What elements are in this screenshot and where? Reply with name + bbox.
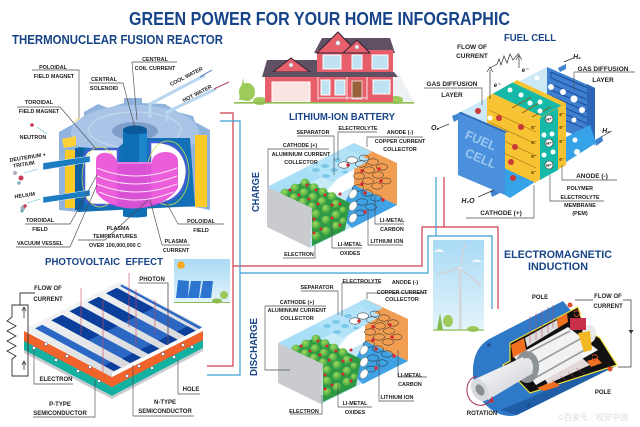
panel: wind turbine — [433, 240, 484, 332]
fusion reactor labels: PLASMA — [165, 239, 187, 245]
fuel cell labels — [424, 44, 635, 218]
panel: photovoltaic effect — [7, 256, 230, 417]
fusion reactor labels: POLOIDAL — [187, 219, 216, 225]
heading: electromagnetic induction: ELECTROMAGNETIC — [504, 249, 612, 261]
fusion reactor labels: SOLENOID — [90, 86, 118, 92]
fuel cell plate text: FUEL — [463, 128, 499, 154]
fuel cell labels: GAS DIFFUSION — [427, 81, 478, 88]
battery cell: discharge — [278, 299, 408, 404]
discharge labels: OXIDES — [345, 410, 366, 416]
fuel cell illustration: e⁻ — [531, 140, 537, 146]
house illustration — [234, 32, 414, 105]
fuel cell labels: O₂ — [431, 125, 439, 132]
particles — [13, 123, 47, 212]
solar cell layers — [24, 282, 203, 399]
discharge labels: CARBON — [398, 382, 422, 388]
external circuit and gas arrows — [437, 54, 612, 197]
fuel cell illustration: H⁺ — [546, 117, 552, 122]
label: discharge: DISCHARGE — [249, 318, 260, 376]
fusion reactor labels: NEUTRON — [20, 135, 46, 141]
fuel cell illustration: H⁺ — [546, 141, 552, 146]
fuel cell labels: H₂ — [573, 54, 581, 61]
resistor circuit — [7, 293, 35, 376]
central solenoid — [123, 126, 147, 218]
fuel cell plate text — [463, 128, 499, 172]
charge labels: LITHIUM ION — [371, 239, 404, 245]
fuel cell labels: GAS DIFFUSION — [578, 66, 629, 73]
fusion reactor labels: OVER 100,000,000 C — [89, 243, 141, 249]
panel: thermonuclear fusion reactor — [9, 33, 229, 254]
fuel cell labels: (PEM) — [572, 211, 588, 217]
generator labels — [467, 294, 623, 417]
fusion reactor labels: TRITIUM — [13, 160, 36, 170]
charge labels: LI-METAL — [338, 242, 363, 248]
charge labels: CARBON — [380, 227, 404, 233]
fuel cell illustration: e⁻ — [559, 112, 565, 118]
plasma torus — [96, 152, 178, 208]
fuel cell plate text: CELL — [463, 146, 499, 172]
generator labels: CURRENT — [593, 304, 623, 310]
fusion reactor labels: TEMPERATURES — [93, 234, 138, 240]
discharge labels: CATHODE (+) — [280, 300, 314, 306]
discharge labels: ANODE (-) — [392, 280, 418, 286]
generator labels: POLE — [532, 295, 548, 301]
fusion reactor labels: FIELD — [32, 227, 48, 233]
fuel cell illustration: e⁻ — [531, 154, 537, 160]
battery cell: charge — [267, 143, 397, 248]
fusion reactor labels: CENTRAL — [142, 57, 169, 63]
fuel cell illustration: H⁺ — [546, 163, 552, 168]
fusion reactor labels: CENTRAL — [91, 77, 118, 83]
fusion reactor labels: HOT WATER — [182, 84, 213, 104]
solar panel picture — [174, 259, 230, 304]
fuel cell labels: CATHODE (+) — [480, 210, 522, 217]
fuel cell illustration: e⁻ — [559, 139, 565, 145]
panel: lithium-ion battery discharge — [249, 279, 428, 416]
discharge labels: COLLECTOR — [385, 297, 419, 303]
fuel cell illustration: e⁻ — [531, 125, 537, 131]
injection pipes — [43, 156, 90, 203]
charge labels: ELECTRON — [284, 252, 314, 258]
fuel cell labels: LAYER — [592, 77, 614, 84]
generator illustration — [467, 300, 634, 416]
fusion reactor labels — [9, 57, 224, 254]
fusion reactor labels: VACUUM VESSEL — [17, 241, 64, 247]
charge labels: SEPARATOR — [297, 130, 330, 136]
heading: electromagnetic induction — [504, 249, 612, 273]
water pipes — [150, 70, 229, 121]
fuel cell labels: e⁻ — [494, 83, 501, 89]
fuel cell labels: FLOW OF — [457, 44, 487, 51]
discharge labels: SEPARATOR — [301, 285, 334, 291]
charge labels: ELECTROLYTE — [338, 126, 378, 132]
fuel cell illustration: e⁻ — [559, 157, 565, 163]
discharge labels: ELECTRON — [289, 409, 319, 415]
charge labels: COPPER CURRENT — [375, 139, 426, 145]
fuel cell labels: LAYER — [441, 92, 463, 99]
fusion reactor labels: POLOIDAL — [39, 65, 68, 71]
photovoltaic labels: P-TYPE — [49, 402, 71, 408]
fuel cell labels: e⁻ — [522, 68, 529, 74]
charge labels: LI-METAL — [380, 218, 405, 224]
fuel cell illustration: e⁻ — [531, 170, 537, 176]
reactor illustration — [13, 70, 229, 218]
charge labels: COLLECTOR — [383, 147, 417, 153]
heading: electromagnetic induction: INDUCTION — [528, 261, 588, 273]
charge labels — [268, 126, 426, 258]
fusion reactor labels: TOROIDAL — [25, 100, 54, 106]
discharge labels: ALUMINIUM CURRENT — [268, 308, 327, 314]
photovoltaic labels: SEMICONDUCTOR — [138, 409, 192, 415]
charge labels: COLLECTOR — [284, 160, 318, 166]
discharge labels: LITHIUM ION — [381, 395, 414, 401]
fuel cell labels: POLYMER — [567, 186, 593, 192]
fuel cell illustration: e⁻ — [559, 125, 565, 131]
discharge labels: ELECTROLYTE — [342, 279, 382, 285]
fuel cell labels: CURRENT — [456, 53, 488, 60]
charge labels: OXIDES — [340, 251, 361, 257]
fusion reactor labels: CURRENT — [163, 248, 190, 254]
photovoltaic labels: FLOW OF — [34, 286, 62, 292]
discharge labels: LI-METAL — [343, 401, 368, 407]
fusion reactor labels: COIL CURRENT — [135, 66, 176, 72]
fusion reactor labels: PLASMA — [107, 226, 129, 232]
photovoltaic labels: CURRENT — [33, 297, 63, 303]
photon rays — [81, 273, 168, 372]
fusion reactor labels: FIELD MAGNET — [19, 109, 60, 115]
fuel cell labels: ELECTROLYTE — [560, 195, 600, 201]
generator labels: FLOW OF — [594, 294, 622, 300]
panel: fuel cell — [424, 33, 635, 218]
fuel cell labels: H₂O — [461, 198, 475, 205]
fuel cell illustration — [437, 54, 612, 198]
connecting wires — [207, 113, 498, 375]
fusion reactor labels: DEUTERIUM + — [9, 152, 46, 164]
panel: lithium-ion battery charge — [251, 111, 426, 258]
heading: fuel cell: FUEL CELL — [504, 33, 556, 44]
discharge labels: COPPER CURRENT — [377, 290, 428, 296]
generator labels: ROTATION — [467, 411, 497, 417]
fusion reactor labels: FIELD MAGNET — [34, 74, 75, 80]
heading: fusion reactor: THERMONUCLEAR FUSION REACTOR — [12, 33, 223, 47]
fusion reactor labels: COOL WATER — [169, 66, 204, 88]
heading: photovoltaic effect: PHOTOVOLTAIC EFFECT — [45, 256, 164, 268]
fuel cell labels: ANODE (-) — [576, 173, 608, 180]
charge labels: ANODE (-) — [387, 130, 413, 136]
photovoltaic labels: SEMICONDUCTOR — [33, 411, 87, 417]
heading: lithium-ion battery: LITHIUM-ION BATTERY — [289, 111, 395, 123]
fuel cell labels: H₂ — [602, 128, 610, 135]
charge labels: CATHODE (+) — [283, 143, 317, 149]
fusion reactor labels: FIELD — [193, 228, 209, 234]
photovoltaic labels — [33, 277, 200, 417]
fuel cell labels: MEMBRANE — [564, 203, 596, 209]
fusion reactor labels: TOROIDAL — [26, 218, 55, 224]
label: charge: CHARGE — [251, 172, 262, 212]
photovoltaic labels: PHOTON — [139, 277, 165, 283]
photovoltaic labels: HOLE — [183, 387, 199, 393]
watermark: ©百家号／视觉中国 — [558, 412, 628, 422]
title: GREEN POWER FOR YOUR HOME INFOGRAPHIC — [129, 9, 510, 29]
fusion reactor labels: HELIUM — [14, 192, 36, 200]
discharge labels: LI-METAL — [398, 373, 423, 379]
panel: electromagnetic induction — [467, 249, 634, 417]
photovoltaic labels: N-TYPE — [154, 400, 176, 406]
discharge labels — [265, 279, 428, 416]
discharge labels: COLLECTOR — [280, 316, 314, 322]
generator labels: POLE — [595, 390, 611, 396]
photovoltaic labels: ELECTRON — [40, 377, 72, 383]
charge labels: ALUMINIUM CURRENT — [272, 152, 331, 158]
